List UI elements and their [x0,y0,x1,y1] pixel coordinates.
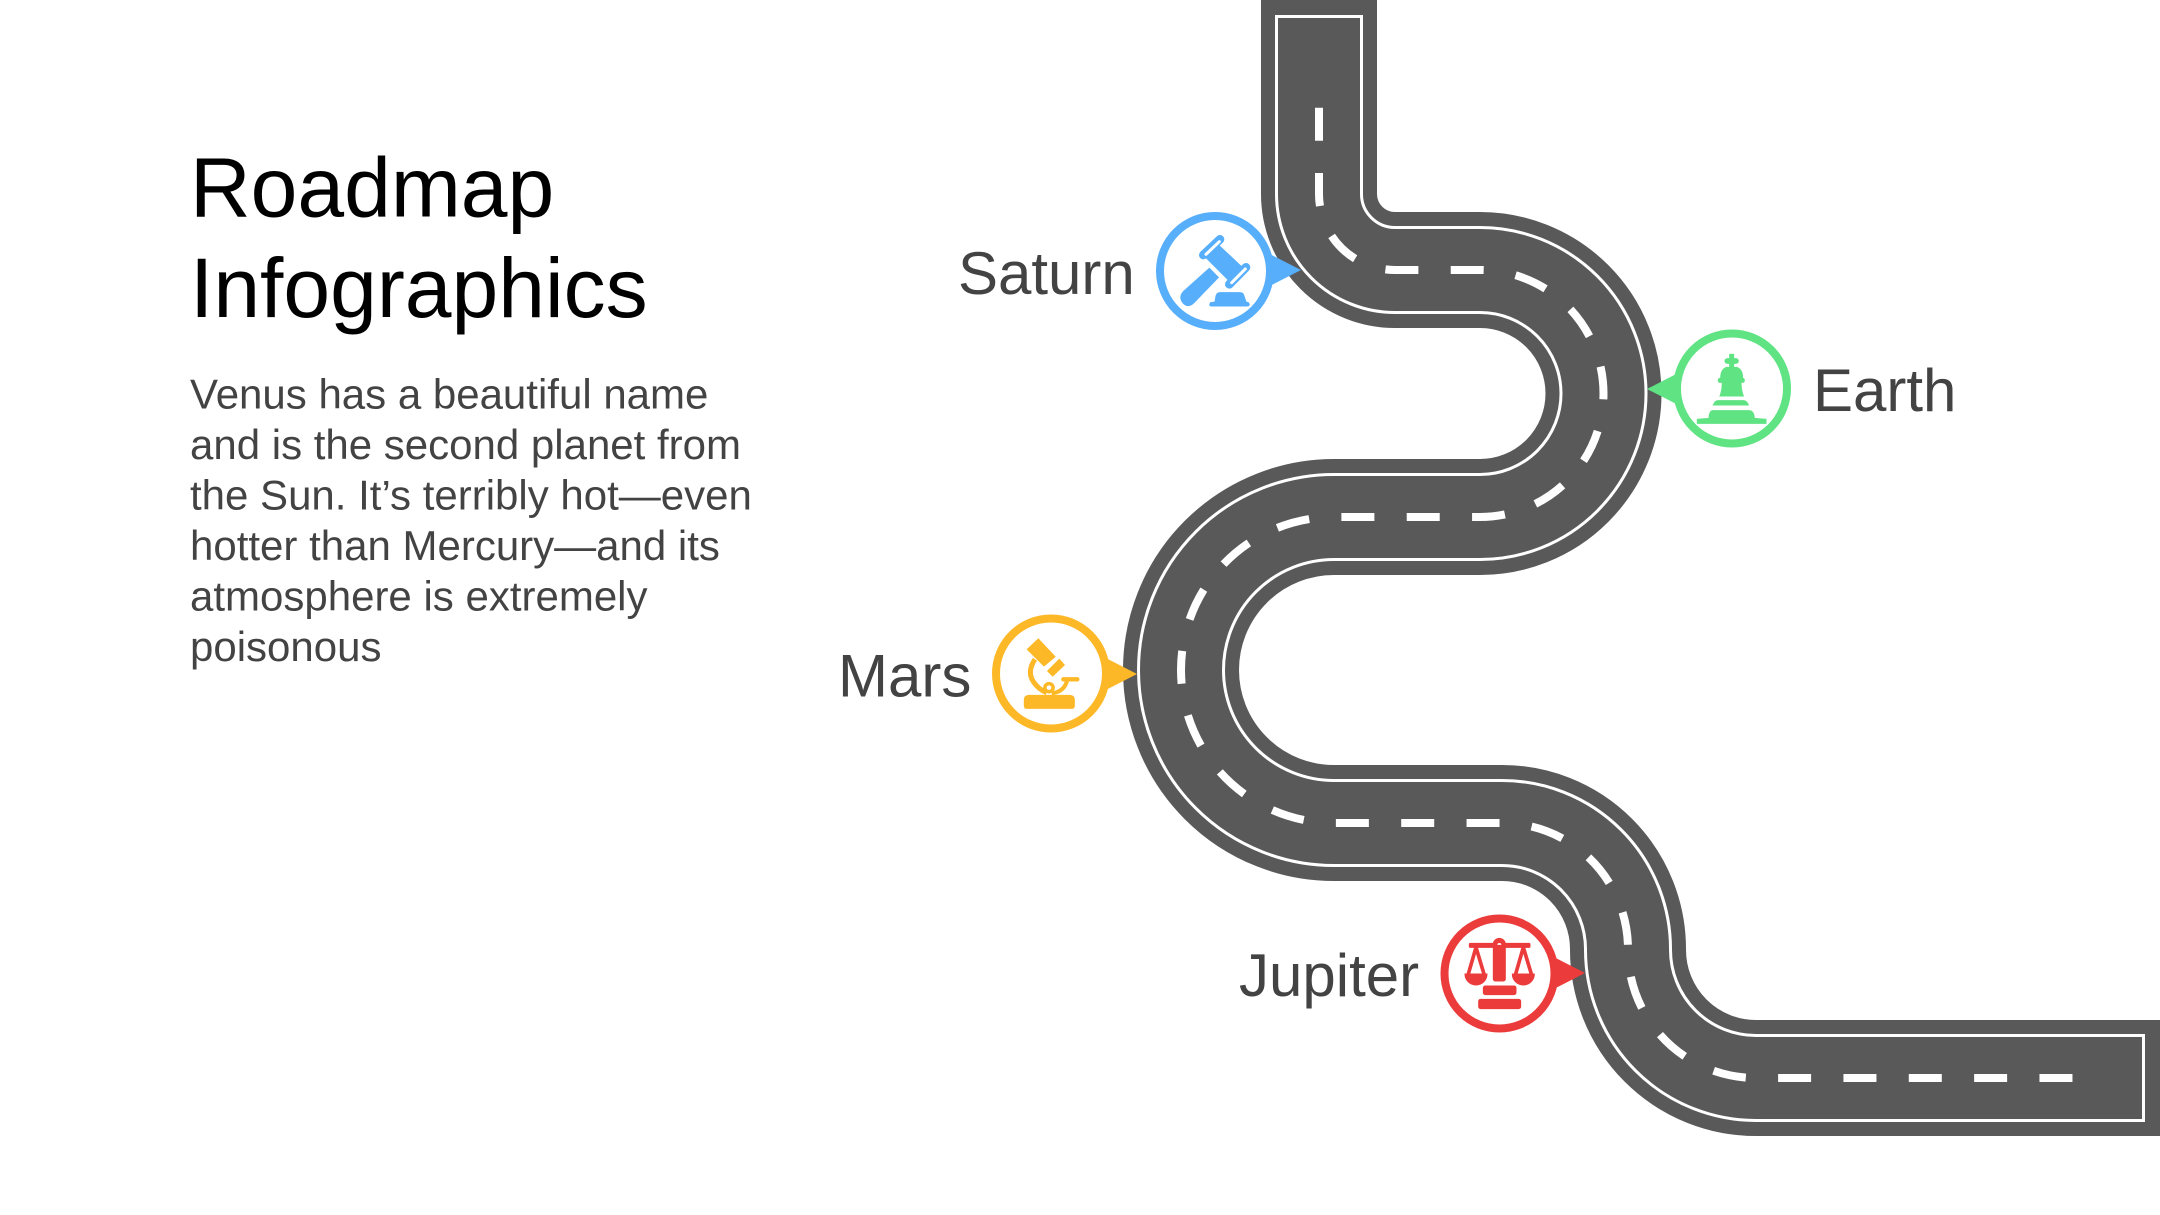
winding road [1181,0,2160,1078]
pin: Earth [1647,334,1787,444]
icon: chess king [1697,354,1766,423]
title: Roadmap [190,140,554,234]
body text: poisonous [190,623,381,670]
label: Jupiter: Jupiter [1239,942,1419,1009]
icon: microscope [1024,639,1079,708]
icon: scales [1465,938,1534,1009]
body text: atmosphere is extremely [190,572,648,620]
marker: Jupiter [1239,918,1585,1028]
body text: hotter than Mercury—and its [190,522,720,569]
label: Earth: Earth [1813,357,1956,424]
icon: gavel [1181,239,1249,306]
pin: Jupiter [1444,918,1585,1028]
marker: Earth [1647,334,1956,444]
label: Mars: Mars [838,642,971,710]
body text: Venus has a beautiful name [190,370,708,418]
body text: and is the second planet from [190,421,741,468]
pin: Mars [996,618,1137,728]
body text: the Sun. It’s terribly hot—even [190,472,752,518]
pin: Saturn [1160,216,1301,326]
marker: Mars [838,618,1137,728]
label: Saturn: Saturn [958,240,1135,307]
body text [190,370,752,670]
title [190,140,648,335]
title: Infographics [190,241,648,335]
marker: Saturn [958,216,1301,326]
